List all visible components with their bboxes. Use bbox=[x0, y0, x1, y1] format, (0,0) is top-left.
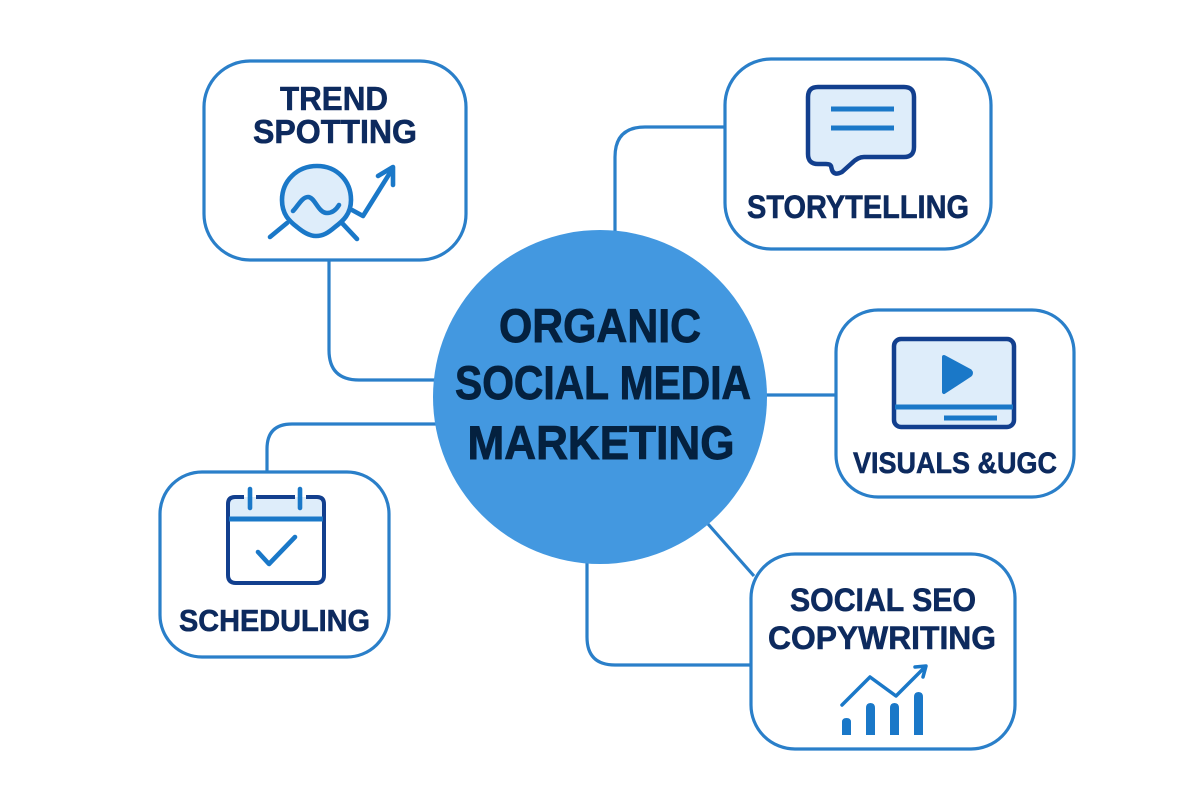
heading: trend spotting: SPOTTING bbox=[253, 113, 417, 150]
central hub: organic social media marketing bbox=[433, 230, 767, 564]
label: visuals and ugc: VISUALS &UGC bbox=[853, 447, 1057, 480]
panel: visuals and ugc bbox=[836, 310, 1074, 497]
heading: trend spotting bbox=[253, 80, 417, 150]
central hub: organic social media marketing: SOCIAL MEDIA bbox=[455, 356, 751, 409]
panel: storytelling bbox=[725, 59, 991, 249]
icon: rising bar chart bbox=[842, 666, 926, 735]
icon: magnifier with trend arrow bbox=[270, 166, 393, 239]
heading: social seo copywriting bbox=[768, 582, 996, 656]
heading: social seo copywriting: SOCIAL SEO bbox=[790, 582, 976, 618]
icon: speech bubble bbox=[808, 87, 914, 174]
central hub: organic social media marketing: ORGANIC bbox=[499, 299, 701, 352]
panel: trend spotting bbox=[204, 61, 466, 260]
connectors bbox=[267, 127, 835, 665]
heading: social seo copywriting: COPYWRITING bbox=[768, 620, 996, 656]
panel: social seo copywriting bbox=[751, 554, 1015, 749]
central hub: organic social media marketing: MARKETING bbox=[468, 416, 734, 469]
panel: scheduling bbox=[160, 472, 389, 657]
icon: calendar with check bbox=[228, 489, 324, 583]
label: storytelling: STORYTELLING bbox=[747, 189, 969, 225]
heading: trend spotting: TREND bbox=[280, 80, 388, 117]
label: scheduling: SCHEDULING bbox=[179, 603, 370, 638]
icon: video player bbox=[894, 339, 1014, 427]
